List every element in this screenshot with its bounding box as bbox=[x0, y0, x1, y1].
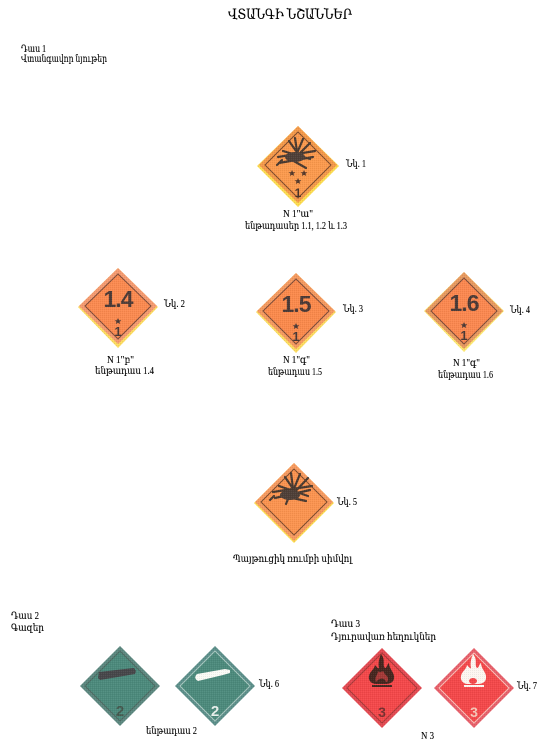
caption: figure 4: N 1"գ" bbox=[453, 358, 480, 369]
caption: figure 2: N 1"բ" bbox=[107, 355, 134, 366]
heading: class 3 bbox=[331, 619, 436, 643]
caption: figure 1 bbox=[245, 209, 347, 232]
caption: figure 4: ենթադաս 1.6 bbox=[438, 369, 493, 381]
icon: diamond 1.5: 1 bbox=[292, 329, 300, 344]
heading: class 3: Դաս 3 bbox=[331, 619, 360, 630]
icon: diamond 1.6: 1 bbox=[460, 328, 468, 343]
caption: figure 3: ենթադաս 1.5 bbox=[268, 366, 322, 378]
icon: green diamond with dark cylinder: 2 bbox=[116, 703, 124, 720]
title: ՎՏԱՆԳԻ ՆՇԱՆՆԵՐ bbox=[228, 7, 352, 22]
icon: red diamond with dark flame bbox=[342, 648, 422, 728]
caption: figure 4 bbox=[438, 358, 493, 381]
heading: class 3: Դյուրավառ հեղուկներ bbox=[331, 631, 436, 643]
icon: green diamond with white cylinder bbox=[175, 646, 255, 726]
icon: diamond 1.5 bbox=[256, 273, 336, 353]
label: figure 3: Նկ. 3 bbox=[342, 303, 363, 315]
icon: red diamond with dark flame: 3 bbox=[378, 704, 386, 720]
icon: red diamond with white flame bbox=[434, 648, 514, 728]
icon: green diamond with white cylinder: 2 bbox=[211, 703, 219, 720]
caption: N 3: N 3 bbox=[421, 731, 434, 742]
heading: class 2: Գազեր bbox=[11, 622, 44, 634]
icon: diamond explosive 1.1-1.3 bbox=[257, 126, 339, 207]
caption: figure 1: ենթադասեր 1.1, 1.2 և 1.3 bbox=[245, 220, 347, 232]
heading: class 2: Դաս 2 bbox=[11, 611, 39, 622]
heading: class 1 bbox=[21, 44, 107, 65]
icon: diamond 1.6: 1.6 bbox=[450, 290, 479, 316]
icon: diamond explosive 1.1-1.3: 1 bbox=[295, 186, 302, 200]
caption: figure 3: N 1"գ" bbox=[283, 355, 310, 366]
caption: figure 2 bbox=[95, 355, 155, 377]
label: figure 7: Նկ. 7 bbox=[516, 680, 537, 692]
caption: subclass 2: ենթադաս 2 bbox=[146, 725, 197, 737]
label: figure 5: Նկ. 5 bbox=[336, 496, 357, 508]
icon: diamond exploding bomb symbol bbox=[254, 463, 334, 543]
label: figure 1: Նկ. 1 bbox=[345, 158, 366, 170]
icon: diamond 1.6 bbox=[424, 272, 504, 352]
label: figure 2: Նկ. 2 bbox=[163, 298, 185, 310]
heading: class 2 bbox=[11, 611, 44, 634]
caption: figure 1: N 1"ա" bbox=[283, 209, 313, 220]
icon: diamond 1.4: 1.4 bbox=[104, 286, 134, 312]
label: figure 4: Նկ. 4 bbox=[509, 304, 531, 316]
icon: diamond 1.4 bbox=[78, 268, 158, 348]
caption: figure 2: ենթադաս 1.4 bbox=[95, 365, 155, 377]
heading: class 1: Դաս 1 bbox=[21, 44, 46, 55]
icon: diamond 1.4: 1 bbox=[114, 324, 122, 339]
caption: exploding bomb symbol: Պայթուցիկ ռումբի սիմվոլ bbox=[233, 553, 353, 565]
caption: figure 3 bbox=[268, 355, 322, 378]
icon: diamond 1.5: 1.5 bbox=[282, 291, 312, 317]
heading: class 1: Վտանգավոր նյութեր bbox=[21, 53, 107, 65]
icon: red diamond with white flame: 3 bbox=[470, 704, 478, 720]
label: figure 6: Նկ. 6 bbox=[258, 678, 279, 690]
icon: green diamond with dark cylinder bbox=[80, 646, 160, 726]
